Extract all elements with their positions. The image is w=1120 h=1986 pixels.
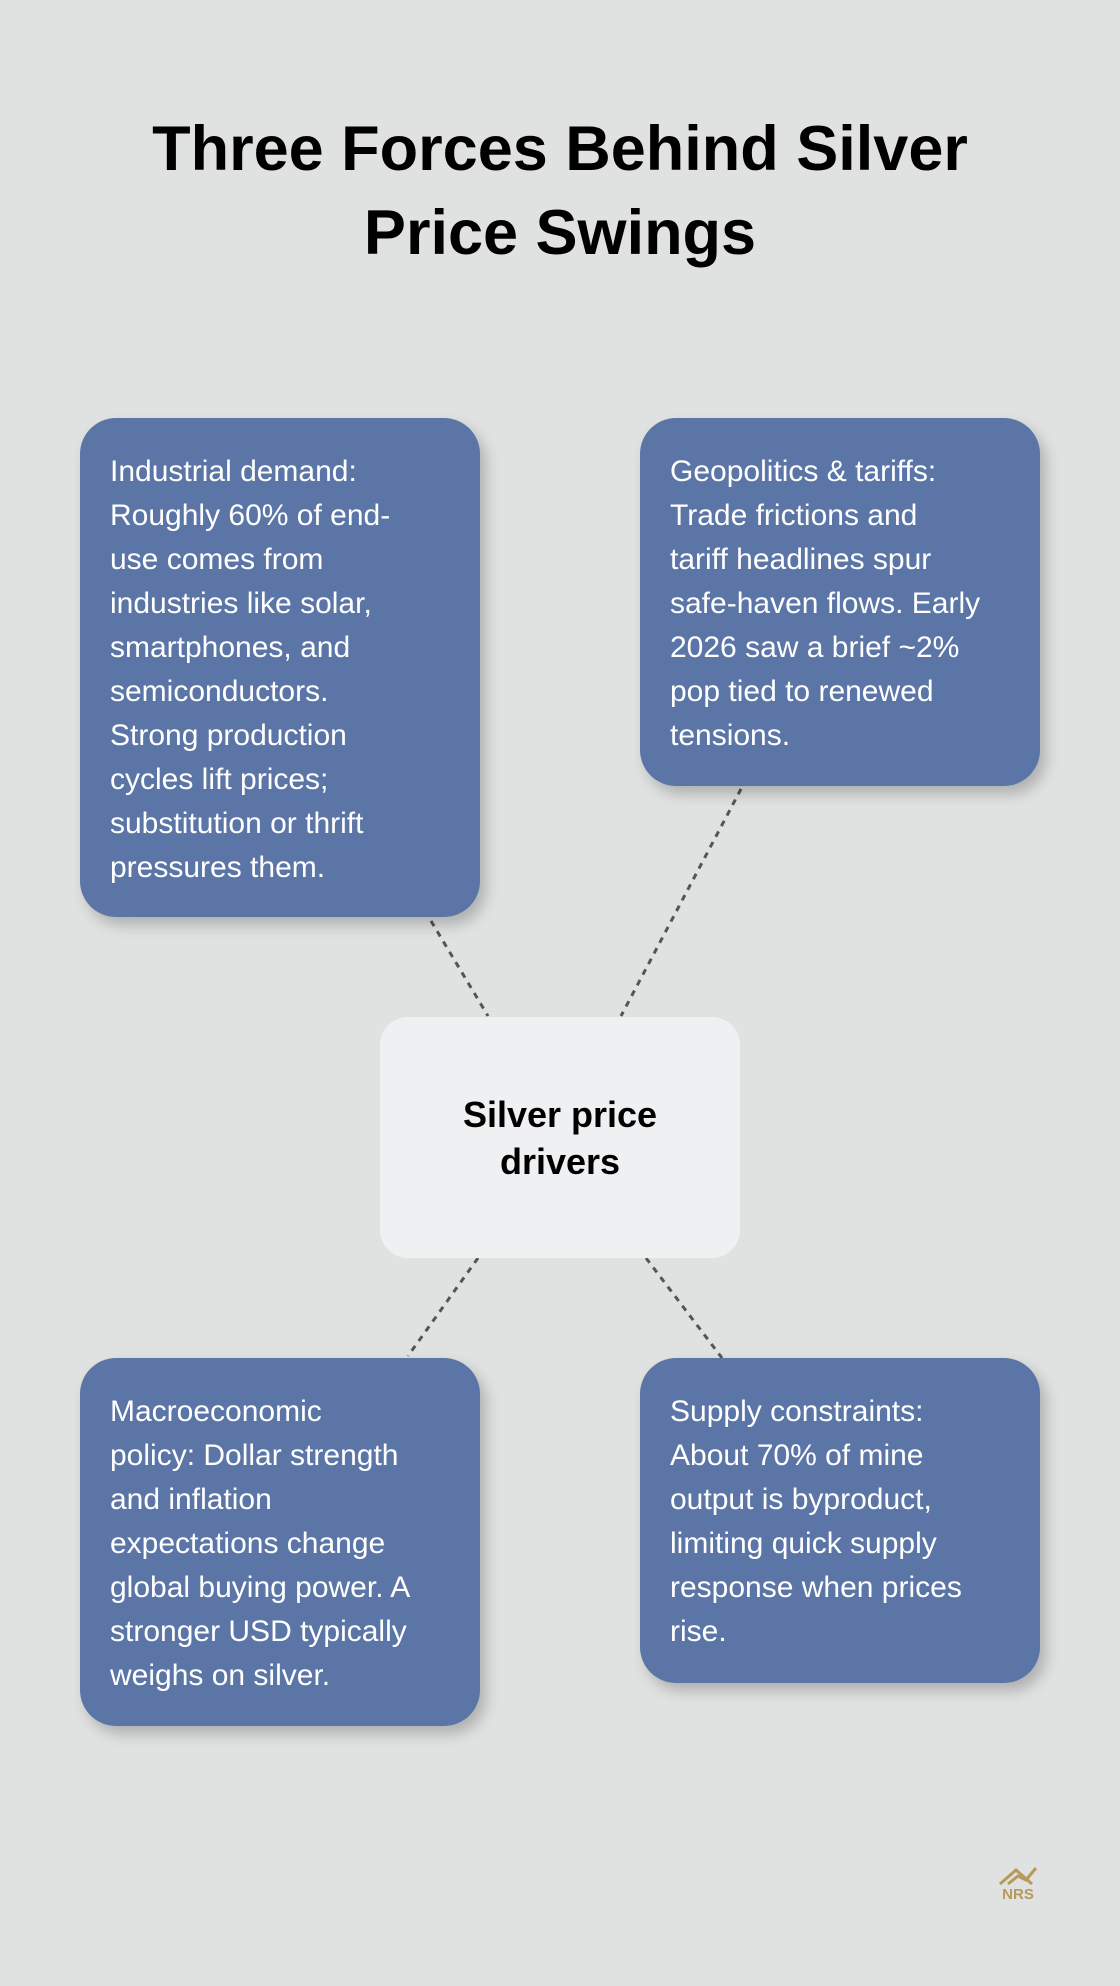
panel: supply <box>640 1358 1040 1683</box>
panel: supply: Supply constraints: <box>670 1395 923 1428</box>
panel: macro policy: stronger USD typically <box>110 1615 407 1648</box>
panel: geopolitics: tariff headlines spur <box>670 543 931 576</box>
panel: geopolitics <box>640 418 1040 786</box>
logo: NRS <box>1002 1886 1034 1903</box>
panel: macro policy: Macroeconomic <box>110 1395 322 1428</box>
panel: industrial demand: pressures them. <box>110 851 325 884</box>
panel: industrial demand: Industrial demand: <box>110 455 357 488</box>
panel: geopolitics: Trade frictions and <box>670 499 917 532</box>
panel: industrial demand: Roughly 60% of end- <box>110 499 390 532</box>
panel: geopolitics: 2026 saw a brief ~2% <box>670 631 959 664</box>
center node: drivers <box>500 1140 620 1182</box>
panel: supply: limiting quick supply <box>670 1527 937 1560</box>
panel: industrial demand: cycles lift prices; <box>110 763 328 796</box>
panel: macro policy: expectations change <box>110 1527 385 1560</box>
title <box>152 114 968 268</box>
panel: industrial demand: industries like solar, <box>110 587 372 620</box>
panel: macro policy <box>80 1358 480 1726</box>
panel: geopolitics: tensions. <box>670 719 790 752</box>
panel: supply: response when prices <box>670 1571 962 1604</box>
panel: supply: About 70% of mine <box>670 1439 924 1472</box>
panel: industrial demand: use comes from <box>110 543 323 576</box>
panel: geopolitics: safe-haven flows. Early <box>670 587 980 620</box>
panel: supply: rise. <box>670 1615 727 1648</box>
panel: supply: output is byproduct, <box>670 1483 932 1516</box>
panel: macro policy: and inflation <box>110 1483 272 1516</box>
panel: industrial demand: substitution or thrift <box>110 807 363 840</box>
title: Price Swings <box>364 198 756 268</box>
title: Three Forces Behind Silver <box>152 114 968 184</box>
panel: macro policy: weighs on silver. <box>110 1659 330 1692</box>
panel: industrial demand: Strong production <box>110 719 347 752</box>
panel: geopolitics: Geopolitics & tariffs: <box>670 455 936 488</box>
panel: geopolitics: pop tied to renewed <box>670 675 934 708</box>
center node: Silver price <box>463 1094 657 1134</box>
logo <box>999 1867 1037 1903</box>
panel: industrial demand: semiconductors. <box>110 675 328 708</box>
panel: macro policy: policy: Dollar strength <box>110 1439 398 1472</box>
panel: industrial demand <box>80 418 480 917</box>
panel: industrial demand: smartphones, and <box>110 631 350 664</box>
center node <box>380 1017 740 1258</box>
panel: macro policy: global buying power. A <box>110 1571 410 1604</box>
